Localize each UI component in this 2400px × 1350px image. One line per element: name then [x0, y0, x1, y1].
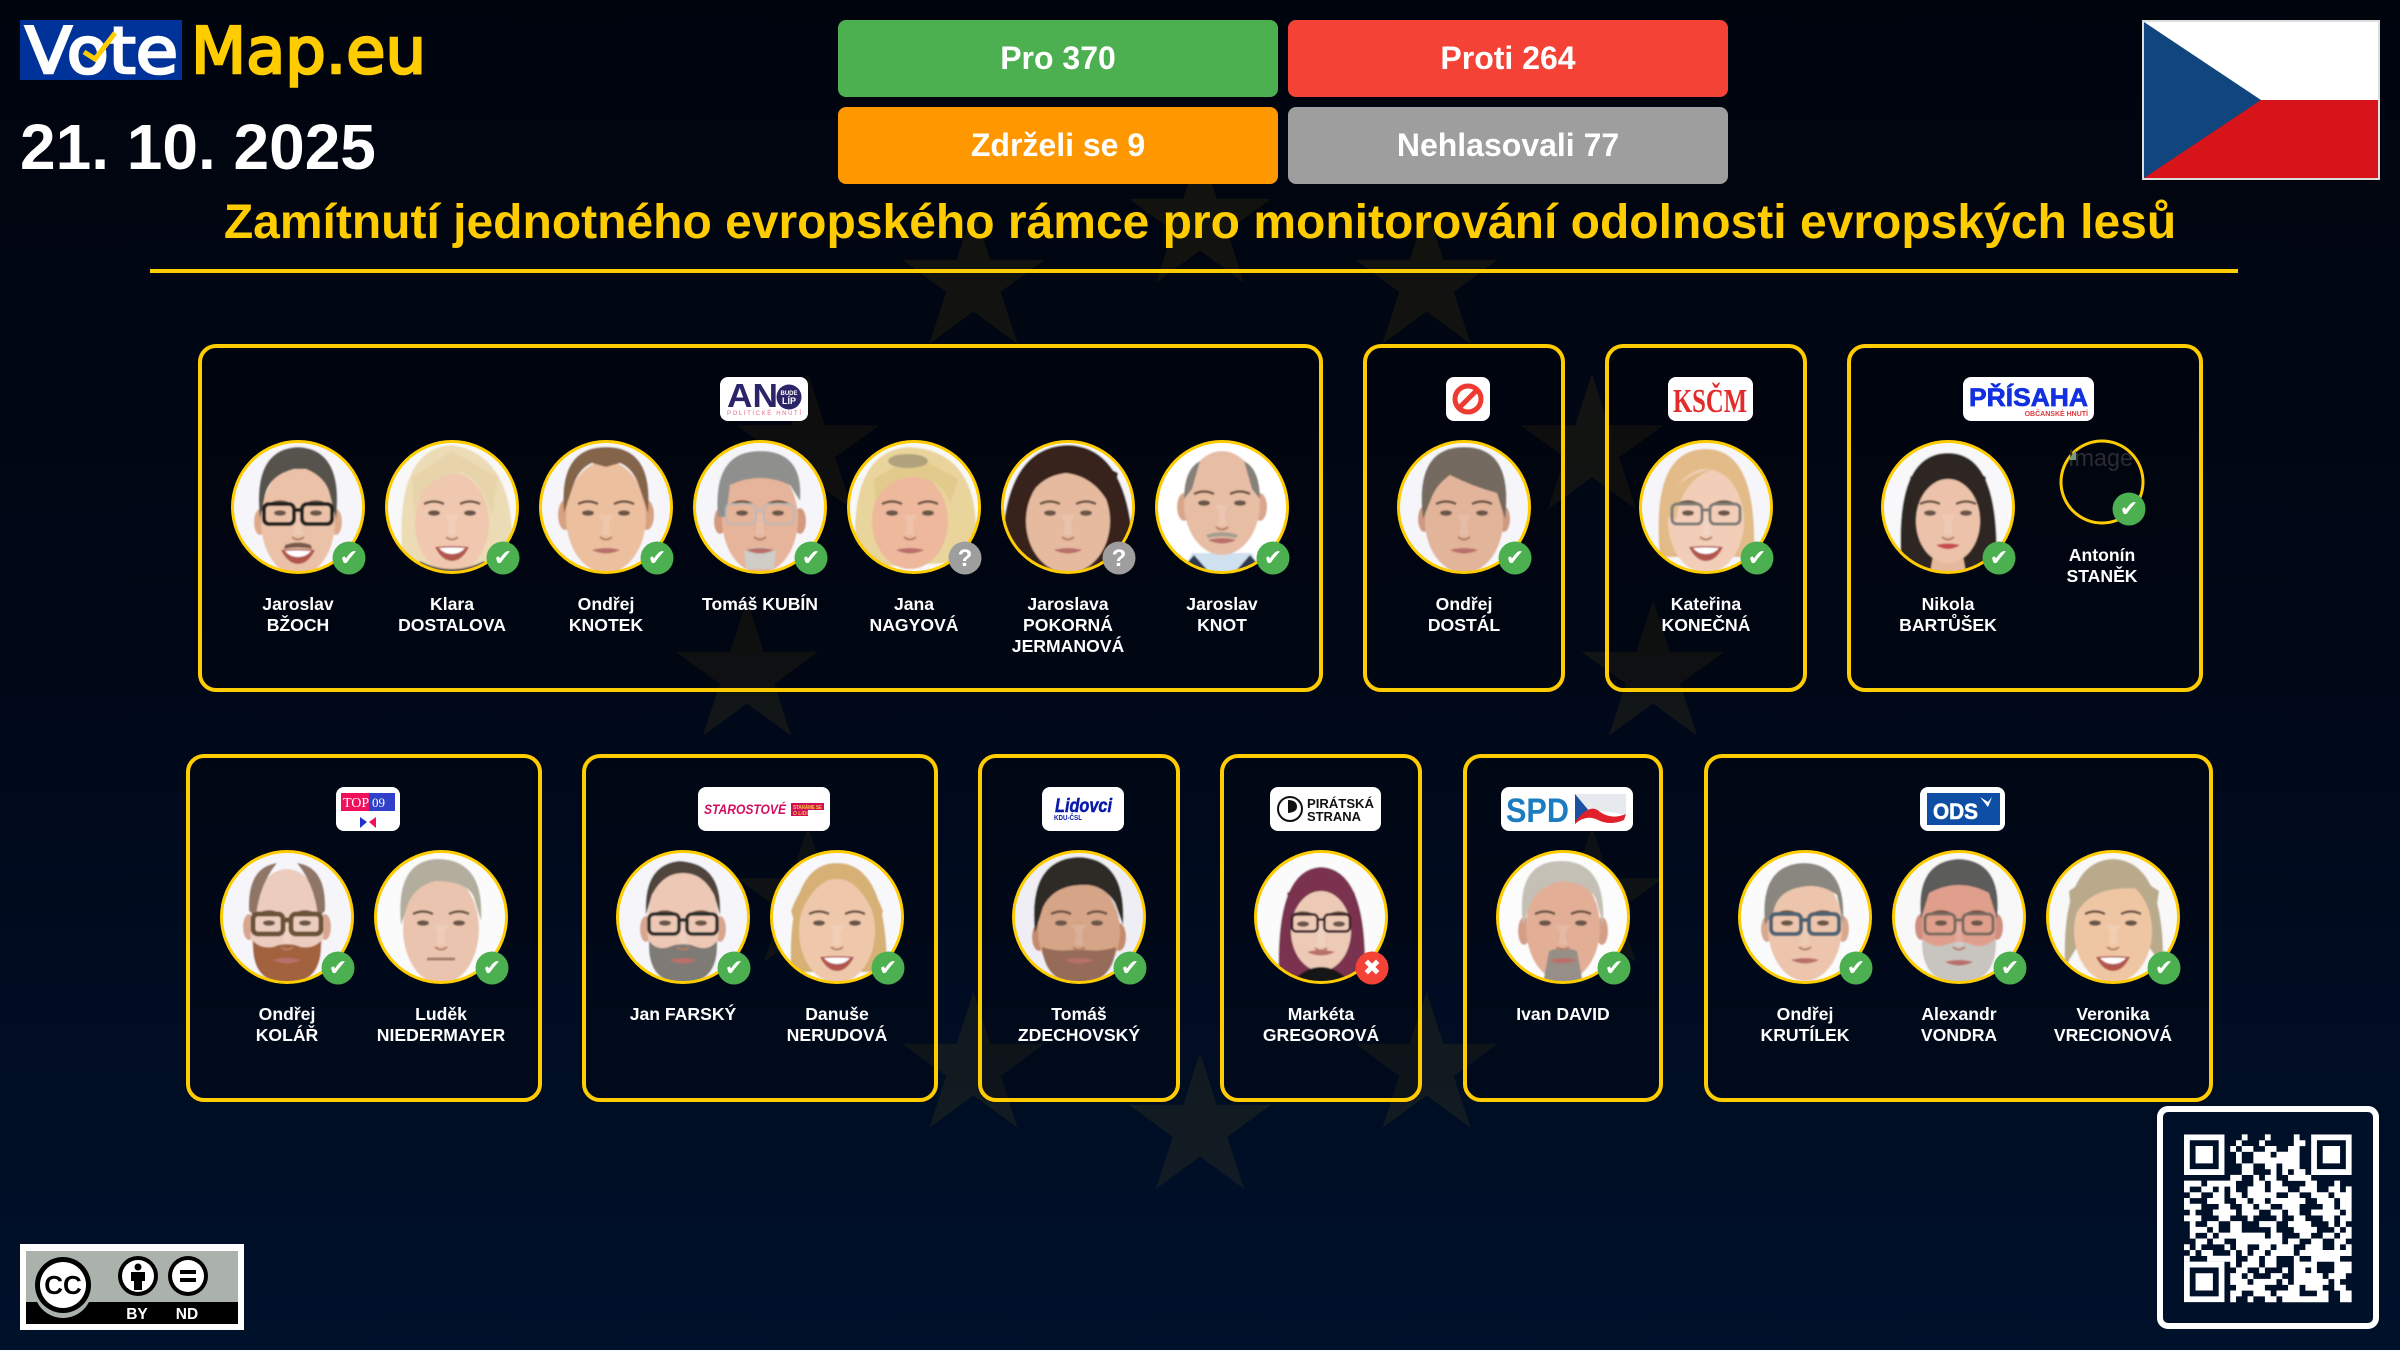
person: Ondřej Knotek: [540, 441, 674, 635]
person: Danuše Nerudová: [771, 851, 904, 1045]
logo: Pirátská strana: STRANA: [1307, 810, 1361, 824]
person: Jan Farský: ✔: [725, 956, 743, 981]
panel: KSČM: [1607, 346, 1805, 690]
person: Ondřej Kolář: Ondřej: [259, 1004, 315, 1024]
person: Ondřej Kolář: KOLÁŘ: [256, 1024, 319, 1045]
person: Nikola Bartůšek: ✔: [1990, 546, 2008, 571]
logo: no party: [1446, 377, 1490, 421]
logo: VoteMap.eu: Map.eu: [191, 15, 426, 89]
logo: ODS: ODS: [1933, 799, 1978, 824]
logo: VoteMap.eu: Vote: [25, 15, 178, 89]
badge: Creative Commons BY-ND: [20, 1244, 244, 1330]
person: Ondřej Knotek: KNOTEK: [569, 615, 643, 635]
logo: Lidovci: [1042, 787, 1124, 831]
person: Ondřej Kolář: [221, 851, 354, 1045]
panel: TOP 09: [188, 756, 540, 1100]
badge: Creative Commons BY-ND: ND: [176, 1306, 198, 1323]
logo: SPD: SPD: [1506, 792, 1569, 830]
logo: Starostové: O LIDI: [793, 811, 808, 817]
person: Nikola Bartůšek: [1882, 441, 2016, 635]
person: Jaroslav Knot: [1156, 441, 1290, 635]
logo: SPD: [1501, 787, 1633, 831]
total: for: Pro 370: [1000, 40, 1116, 76]
person: Ondřej Krutílek: ✔: [1847, 956, 1865, 981]
person: Ivan David: [1497, 851, 1630, 1024]
logo: Přísaha: PŘÍSAHA: [1969, 382, 2088, 412]
person: Ondřej Kolář: ✔: [329, 956, 347, 981]
person: Klara Dostalova: DOSTALOVA: [398, 615, 506, 635]
person: Veronika Vrecionová: Veronika: [2076, 1004, 2150, 1024]
person: Ondřej Krutílek: [1739, 851, 1872, 1045]
person: Jaroslav Knot: KNOT: [1197, 615, 1247, 635]
logo: VoteMap.eu: [20, 15, 426, 89]
badge: Creative Commons BY-ND: CC: [44, 1270, 82, 1300]
person: Nikola Bartůšek: BARTŮŠEK: [1899, 613, 1997, 635]
person: Jaroslav Bžoch: [232, 441, 366, 635]
logo: Pirátská strana: [1270, 787, 1381, 831]
person: Alexandr Vondra: VONDRA: [1921, 1025, 1997, 1045]
logo: Pirátská strana: PIRÁTSKÁ: [1307, 796, 1374, 811]
person: Antonín Staněk: ✔: [2120, 497, 2138, 522]
total: against: Proti 264: [1440, 40, 1576, 76]
logo: ANO: POLITICKÉ HNUTÍ: [727, 410, 801, 417]
person: Danuše Nerudová: NERUDOVÁ: [787, 1024, 888, 1045]
person: Klara Dostalova: [386, 441, 520, 635]
person: Tomáš Zdechovský: ✔: [1121, 956, 1139, 981]
person: Markéta Gregorová: Markéta: [1288, 1004, 1354, 1024]
person: Luděk Niedermayer: ✔: [483, 956, 501, 981]
person: Tomáš Kubín: ✔: [802, 546, 820, 571]
logo: TOP 09: TOP: [343, 796, 369, 811]
person: Jaroslava Pokorná Jermanová: JERMANOVÁ: [1012, 635, 1125, 656]
person: Tomáš Kubín: [694, 441, 828, 614]
icon: Czech flag: [2142, 20, 2380, 180]
title: Zamítnutí jednotného evropského rámce pro monitorování odolnosti evropských lesů: [224, 196, 2176, 249]
logo: Přísaha: [1963, 377, 2094, 421]
date: 21. 10. 2025: [20, 111, 376, 183]
panel: Pirates: [1222, 756, 1420, 1100]
logo: Starostové: [698, 787, 830, 831]
EU stars ring: [676, 147, 1724, 1189]
vote totals: [838, 20, 1728, 184]
person: Kateřina Konečná: Kateřina: [1671, 594, 1741, 614]
panel: Lidovci: [980, 756, 1178, 1100]
person: Antonín Staněk: [2061, 441, 2146, 586]
person: Jan Farský: Jan FARSKÝ: [630, 1003, 737, 1024]
logo: KSČM: KSČM: [1673, 382, 1747, 420]
panel: ANO: [200, 346, 1321, 690]
person: Klara Dostalova: ✔: [494, 546, 512, 571]
logo: ODS: [1920, 787, 2005, 831]
person: Markéta Gregorová: [1255, 851, 1388, 1045]
logo: Lidovci: KDU-ČSL: [1054, 813, 1082, 822]
person: Jaroslav Knot: Jaroslav: [1186, 594, 1258, 614]
person: Ondřej Knotek: ✔: [648, 546, 666, 571]
logo: ANO: LÍP: [782, 396, 796, 406]
person: Veronika Vrecionová: ✔: [2155, 956, 2173, 981]
total: abstained: [838, 107, 1278, 184]
person: Jaroslava Pokorná Jermanová: POKORNÁ: [1023, 614, 1113, 635]
logo: Starostové: STARÁME SE: [793, 804, 823, 811]
person: Jaroslava Pokorná Jermanová: Jaroslava: [1027, 594, 1109, 614]
logo: ANO: BUDE: [780, 391, 798, 397]
person: Alexandr Vondra: [1893, 851, 2026, 1045]
person: Antonín Staněk: Antonín: [2069, 545, 2135, 565]
person: Ondřej Dostál: ✔: [1506, 546, 1524, 571]
panel: Přísaha: [1849, 346, 2201, 690]
person: Antonín Staněk: Image: [2068, 445, 2133, 472]
badge: Creative Commons BY-ND: BY: [126, 1306, 148, 1323]
person: Jaroslav Bžoch: ✔: [340, 546, 358, 571]
person: Veronika Vrecionová: [2047, 851, 2180, 1045]
person: Nikola Bartůšek: Nikola: [1922, 594, 1975, 614]
person: Ondřej Dostál: [1398, 441, 1532, 635]
person: Jaroslav Bžoch: BŽOCH: [267, 614, 329, 635]
total: not voted: [1288, 107, 1728, 184]
person: Ivan David: Ivan DAVID: [1516, 1004, 1610, 1024]
person: Tomáš Kubín: Tomáš KUBÍN: [702, 593, 818, 614]
person: Alexandr Vondra: Alexandr: [1921, 1004, 1997, 1024]
logo: Přísaha: OBČANSKÉ HNUTÍ: [2025, 409, 2089, 418]
person: Tomáš Zdechovský: Tomáš: [1051, 1004, 1107, 1024]
person: Tomáš Zdechovský: [1013, 851, 1146, 1045]
person: Luděk Niedermayer: [375, 851, 508, 1045]
person: Danuše Nerudová: ✔: [879, 956, 897, 981]
person: Jan Farský: [617, 851, 750, 1024]
total: abstained: Zdrželi se 9: [971, 127, 1145, 163]
person: Luděk Niedermayer: NIEDERMAYER: [377, 1025, 505, 1045]
logo: ANO: AN: [727, 377, 778, 414]
person: Luděk Niedermayer: Luděk: [415, 1004, 467, 1024]
person: Kateřina Konečná: ✔: [1748, 546, 1766, 571]
person: Jana Nagyová: Jana: [894, 594, 934, 614]
person: Ivan David: ✔: [1605, 956, 1623, 981]
logo: ANO: [720, 377, 808, 421]
person: Markéta Gregorová: GREGOROVÁ: [1263, 1024, 1379, 1045]
person: Jaroslava Pokorná Jermanová: ?: [1112, 545, 1126, 572]
total: for: [838, 20, 1278, 97]
person: Jaroslav Knot: ✔: [1264, 546, 1282, 571]
person: Jaroslav Bžoch: Jaroslav: [262, 594, 334, 614]
person: Jana Nagyová: ?: [958, 545, 972, 572]
logo: TOP 09: [336, 787, 400, 831]
person: Ondřej Knotek: Ondřej: [578, 594, 634, 614]
QR code: [2160, 1109, 2376, 1326]
person: Alexandr Vondra: ✔: [2001, 956, 2019, 981]
logo: Lidovci: Lidovci: [1055, 796, 1113, 817]
panel: Starostové: [584, 756, 936, 1100]
panel: ODS: [1706, 756, 2211, 1100]
total: against: [1288, 20, 1728, 97]
person: Ondřej Dostál: Ondřej: [1436, 594, 1492, 614]
person: Veronika Vrecionová: VRECIONOVÁ: [2054, 1024, 2172, 1045]
logo: TOP 09: 09: [372, 795, 385, 810]
person: Markéta Gregorová: ✖: [1363, 956, 1381, 981]
logo: KSČM: [1668, 377, 1753, 421]
panel: SPD: [1465, 756, 1661, 1100]
panel: independent: [1365, 346, 1563, 690]
person: Jana Nagyová: NAGYOVÁ: [870, 614, 959, 635]
person: Ondřej Dostál: DOSTÁL: [1428, 614, 1500, 635]
person: Antonín Staněk: STANĚK: [2066, 565, 2138, 586]
total: not voted: Nehlasovali 77: [1397, 127, 1619, 163]
person: Kateřina Konečná: [1640, 441, 1774, 635]
person: Ondřej Krutílek: Ondřej: [1777, 1004, 1833, 1024]
person: Tomáš Zdechovský: ZDECHOVSKÝ: [1018, 1024, 1140, 1045]
person: Ondřej Krutílek: KRUTÍLEK: [1761, 1024, 1850, 1045]
person: Kateřina Konečná: KONEČNÁ: [1662, 614, 1751, 635]
person: Jaroslava Pokorná Jermanová: [1002, 441, 1136, 656]
logo: Starostové: STAROSTOVÉ: [704, 802, 787, 817]
person: Klara Dostalova: Klara: [430, 594, 474, 614]
person: Jana Nagyová: [848, 441, 982, 635]
person: Danuše Nerudová: Danuše: [805, 1004, 869, 1024]
